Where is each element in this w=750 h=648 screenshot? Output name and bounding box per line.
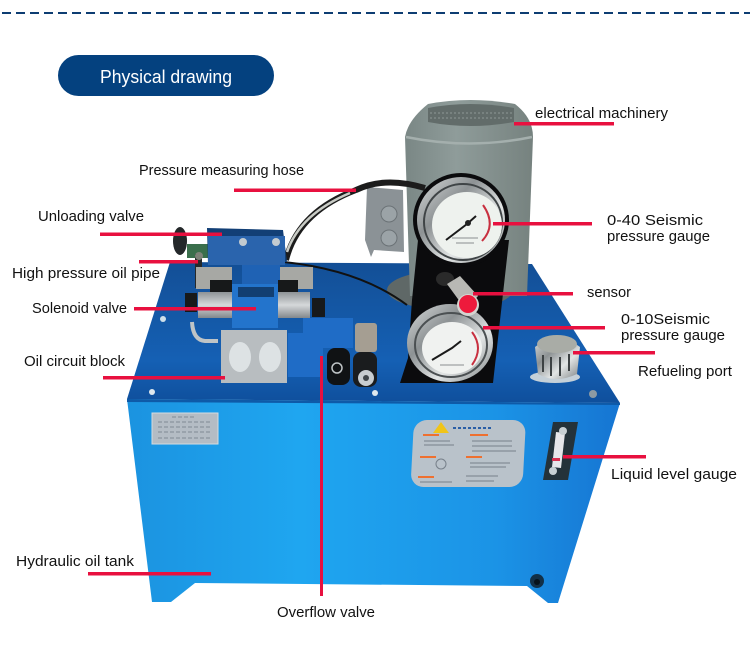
label: Overflow valve: Overflow valve <box>277 604 375 621</box>
label: 0-10Seismic pressure gauge: 0-10Seismic <box>621 311 711 328</box>
warning label panel <box>410 420 526 487</box>
label: electrical machinery: electrical machinery <box>535 105 669 122</box>
hydraulic oil tank <box>127 262 620 603</box>
unloading valve <box>173 227 287 287</box>
label: High pressure oil pipe: High pressure oil pipe <box>12 265 160 282</box>
high pressure oil pipe fitting <box>195 252 203 288</box>
gauge bracket <box>400 240 509 383</box>
label: Hydraulic oil tank <box>16 553 211 576</box>
label: Unloading valve: Unloading valve <box>38 208 144 225</box>
label: 0-40 Seismic pressure gauge: pressure gauge <box>607 228 710 245</box>
label: Refueling port: Refueling port <box>638 363 733 380</box>
refueling port <box>530 335 580 383</box>
label: sensor: sensor <box>587 284 631 301</box>
label: 0-10Seismic pressure gauge: pressure gauge <box>621 327 725 344</box>
label: Liquid level gauge: Liquid level gauge <box>611 466 737 483</box>
gauge: 0-40 seismic pressure gauge <box>413 173 509 267</box>
label: Pressure measuring hose: Pressure measuring hose <box>139 162 304 179</box>
label: Solenoid valve: Solenoid valve <box>32 300 127 317</box>
label: 0-10Seismic pressure gauge <box>483 311 725 344</box>
pressure measuring hose <box>284 182 425 305</box>
label: 0-40 Seismic pressure gauge <box>493 212 710 245</box>
label: High pressure oil pipe <box>12 260 198 282</box>
label: Oil circuit block: Oil circuit block <box>24 353 125 370</box>
heading pill: Physical drawing: Physical drawing <box>100 67 232 87</box>
label: Solenoid valve <box>32 300 256 317</box>
label: Refueling port <box>573 351 733 380</box>
label: Oil circuit block <box>24 353 225 380</box>
label: 0-40 Seismic pressure gauge: 0-40 Seismic <box>607 212 704 229</box>
label: Pressure measuring hose <box>139 162 356 192</box>
electrical machinery (motor) <box>387 100 533 310</box>
liquid level gauge window <box>543 422 578 480</box>
label: Hydraulic oil tank: Hydraulic oil tank <box>16 553 135 570</box>
oil circuit block <box>192 322 287 383</box>
gauge: 0-10 seismic pressure gauge <box>407 304 493 382</box>
label: Liquid level gauge <box>563 455 737 483</box>
label: Unloading valve <box>38 208 222 236</box>
heading pill: Physical drawing <box>58 55 274 96</box>
junction box <box>365 187 404 257</box>
solenoid valve <box>185 267 325 328</box>
sensor <box>436 272 479 316</box>
label: sensor <box>473 284 631 301</box>
drain plug <box>530 574 544 588</box>
label: Overflow valve <box>277 356 375 621</box>
nameplate <box>152 413 218 444</box>
overflow valve <box>288 318 377 387</box>
